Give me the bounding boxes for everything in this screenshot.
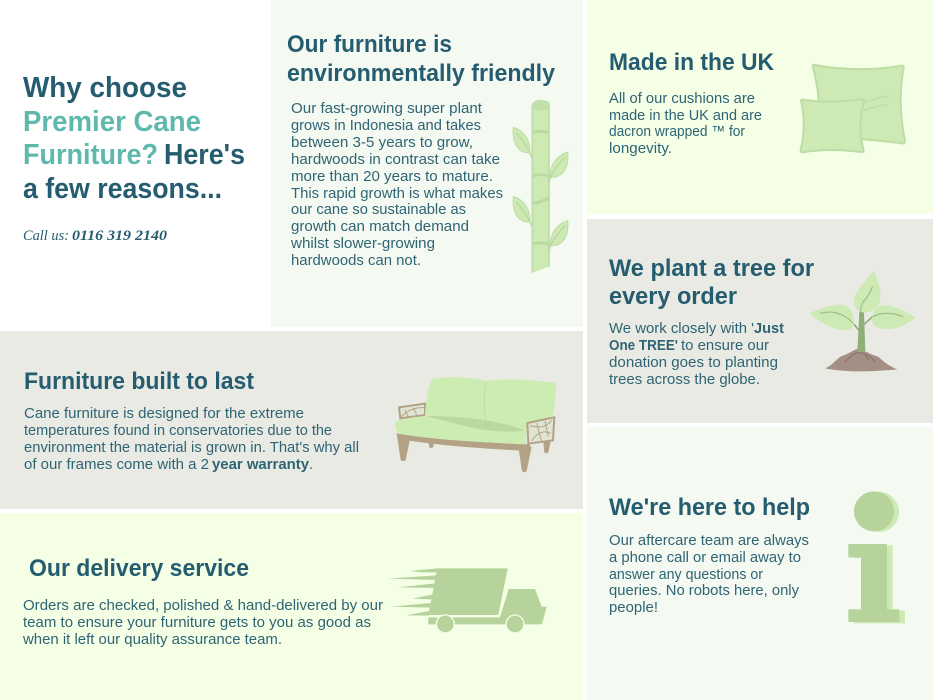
call us phone number: Call us: bbox=[23, 228, 69, 244]
call us phone number: 0116 319 2140 bbox=[72, 228, 168, 244]
heading: plant a tree: every order bbox=[609, 283, 737, 310]
text: tree body: trees across the globe. bbox=[609, 372, 760, 388]
heading: made in the UK: Made in the UK bbox=[609, 49, 775, 76]
text: built to last body: of our frames come with a 2 bbox=[24, 457, 209, 473]
text: help body: Our aftercare team are always bbox=[609, 533, 809, 549]
text: tree body: We work closely with ' bbox=[609, 321, 754, 337]
text: help body bbox=[609, 533, 809, 616]
panel: delivery service bbox=[0, 513, 583, 700]
title: Furniture? bbox=[23, 139, 158, 171]
text: tree body bbox=[609, 321, 784, 388]
heading: here to help: We're here to help bbox=[609, 494, 810, 521]
heading: delivery service: Our delivery service bbox=[29, 555, 249, 582]
title: Here's bbox=[164, 139, 245, 171]
text: help body: people! bbox=[609, 600, 658, 616]
text: cushions body: made in the UK and are bbox=[609, 108, 762, 124]
text: environmental body: growth can match demand bbox=[291, 219, 469, 235]
text: tree body: donation goes to planting bbox=[609, 355, 778, 371]
text: tree body: One TREE' bbox=[609, 338, 678, 354]
heading: built to last: Furniture built to last bbox=[24, 368, 254, 395]
text: environmental body: whilst slower-growing bbox=[290, 236, 435, 252]
icon: information i bbox=[848, 491, 905, 623]
text: cushions body: All of our cushions are bbox=[609, 91, 755, 107]
panel: here to help bbox=[587, 427, 933, 700]
text: cushions body: longevity. bbox=[609, 141, 672, 157]
text: environmental body: hardwoods in contrast can take bbox=[291, 152, 500, 168]
text: environmental body: between 3-5 years to grow, bbox=[291, 135, 473, 151]
text: built to last body: environment the material is grown in. That's why all bbox=[24, 440, 359, 456]
sofa right arm bbox=[527, 417, 554, 444]
sofa back cushions bbox=[425, 377, 556, 430]
icon: seedling bbox=[810, 271, 915, 371]
heading: environmentally friendly bbox=[287, 31, 556, 87]
text: built to last body: temperatures found in conservatories due to the bbox=[24, 423, 332, 439]
text: environmental body: Our fast-growing super plant bbox=[291, 101, 482, 117]
icon: delivery truck bbox=[387, 568, 547, 633]
text: built to last body: year warranty bbox=[212, 457, 309, 473]
title: Premier Cane bbox=[23, 106, 201, 138]
icon: bamboo bbox=[513, 100, 568, 273]
panel: plant a tree bbox=[587, 219, 933, 423]
panel: made in the UK bbox=[587, 0, 933, 214]
text: tree body: Just bbox=[754, 321, 784, 337]
text: environmental body: our cane so sustainable as bbox=[291, 202, 466, 218]
title bbox=[23, 72, 245, 205]
title: a few reasons... bbox=[23, 173, 222, 205]
panel: built to last bbox=[0, 331, 583, 509]
sofa legs bbox=[397, 433, 551, 472]
text: help body: answer any questions or bbox=[609, 567, 763, 583]
panel: environmentally friendly bbox=[271, 0, 583, 327]
text: help body: a phone call or email away to bbox=[609, 550, 801, 566]
text: delivery body: Orders are checked, polished & hand-delivered by our bbox=[23, 598, 383, 614]
panel: intro bbox=[0, 0, 271, 327]
text: cushions body bbox=[609, 91, 762, 157]
text: environmental body: hardwoods can not. bbox=[291, 253, 421, 269]
heading: plant a tree bbox=[609, 255, 814, 310]
text: environmental body: This rapid growth is what makes bbox=[291, 186, 503, 202]
heading: environmentally friendly: Our furniture is bbox=[287, 31, 452, 58]
text: built to last body: Cane furniture is designed for the extreme bbox=[24, 406, 304, 422]
heading: plant a tree: We plant a tree for bbox=[609, 255, 814, 282]
text: tree body: to ensure our bbox=[681, 338, 769, 354]
text: delivery body: team to ensure your furniture gets to you as good as bbox=[23, 615, 371, 631]
sofa seat bbox=[395, 416, 527, 444]
text: environmental body bbox=[290, 101, 503, 269]
text: built to last body bbox=[24, 406, 359, 473]
icon: cushions bbox=[801, 65, 905, 152]
text: environmental body: more than 20 years to mature. bbox=[291, 169, 493, 185]
call us phone number bbox=[23, 228, 168, 244]
title: Why choose bbox=[23, 72, 187, 104]
text: environmental body: grows in Indonesia and takes bbox=[291, 118, 481, 134]
text: delivery body bbox=[22, 598, 383, 648]
text: help body: queries. No robots here, only bbox=[609, 583, 800, 599]
sofa left arm bbox=[399, 404, 425, 418]
heading: environmentally friendly: environmentally friendly bbox=[287, 60, 556, 87]
text: delivery body: when it left our quality assurance team. bbox=[22, 632, 282, 648]
text: cushions body: dacron wrapped ™ for bbox=[609, 124, 745, 140]
text: built to last body: . bbox=[309, 457, 313, 473]
icon: sofa bbox=[395, 377, 556, 472]
